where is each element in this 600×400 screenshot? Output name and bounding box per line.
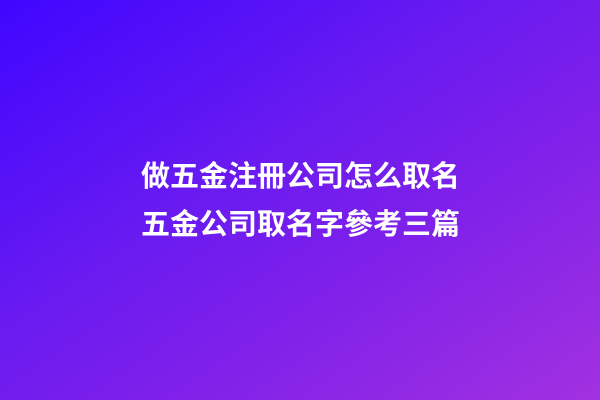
- title line 2: 五金公司取名字參考三篇: [141, 209, 460, 241]
- title line 1: 做五金注冊公司怎么取名: [141, 161, 460, 193]
- title: [141, 160, 460, 241]
